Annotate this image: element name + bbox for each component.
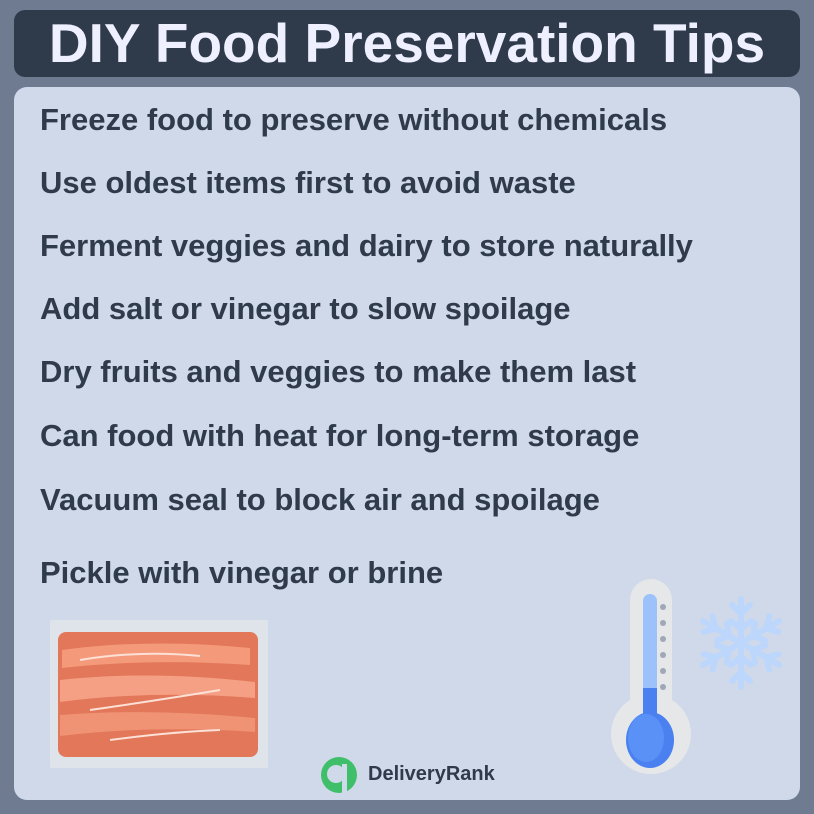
illustration: vacuum sealed meat (50, 620, 268, 768)
illustration: thermometer (611, 579, 691, 774)
icon: snowflake (700, 596, 782, 690)
tip 6: Can food with heat for long-term storage (40, 418, 639, 453)
tip 4: Add salt or vinegar to slow spoilage (40, 291, 571, 326)
tip 3: Ferment veggies and dairy to store naturally (40, 228, 693, 263)
tip 8: Pickle with vinegar or brine (40, 555, 443, 590)
tip 7: Vacuum seal to block air and spoilage (40, 482, 600, 517)
logo: DeliveryRank (321, 757, 495, 793)
tip 5: Dry fruits and veggies to make them last (40, 354, 636, 389)
logo: DeliveryRank: DeliveryRank (368, 763, 495, 785)
title: DIY Food Preservation Tips (49, 12, 765, 74)
tip 2: Use oldest items first to avoid waste (40, 165, 576, 200)
tip 1: Freeze food to preserve without chemicals (40, 102, 667, 137)
